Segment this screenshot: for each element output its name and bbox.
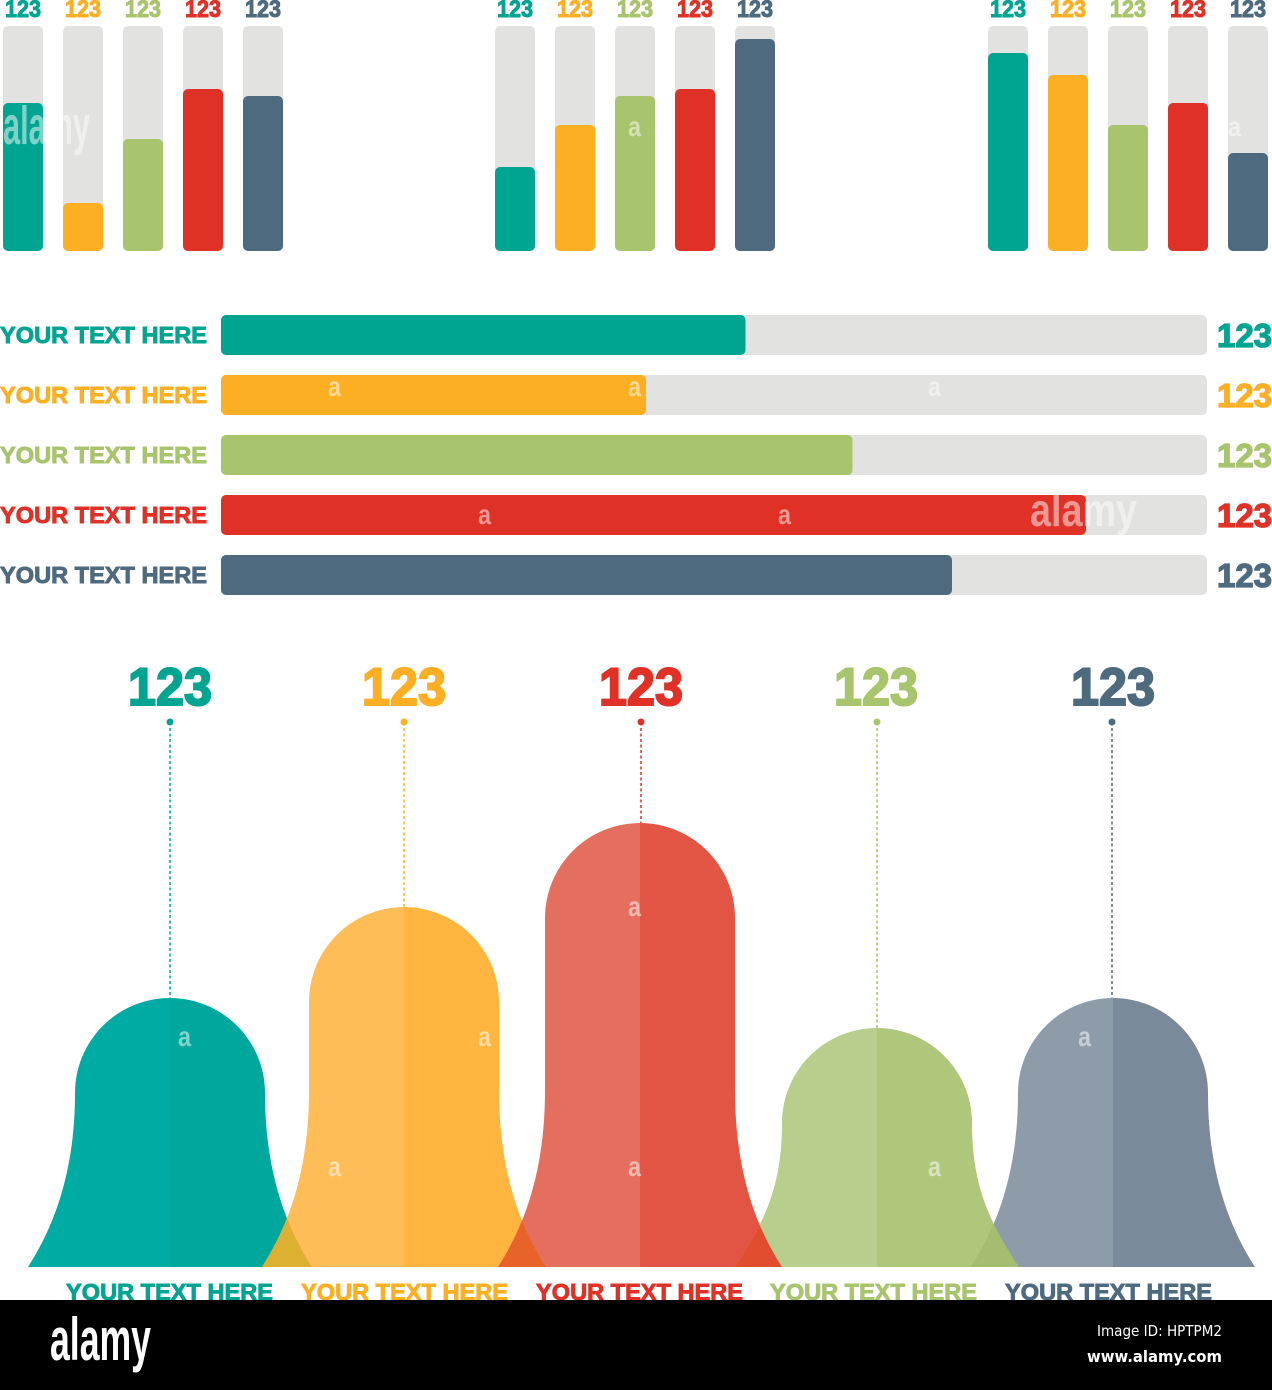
bar green <box>1108 125 1148 251</box>
watermark marks over chart <box>3 96 1241 1182</box>
track <box>221 435 1207 475</box>
track <box>221 375 1207 415</box>
watermark marks over chart: a <box>328 371 341 402</box>
row label: YOUR TEXT HERE <box>0 322 207 348</box>
big number: 123 <box>834 658 918 717</box>
watermark marks over chart: a <box>1228 111 1241 142</box>
watermark marks over chart: a <box>628 1151 641 1182</box>
bell red <box>498 823 782 1267</box>
row slate <box>0 555 1272 595</box>
callout slate <box>1071 658 1155 998</box>
bar orange <box>63 203 103 251</box>
watermark marks over chart: a <box>478 499 491 530</box>
bar green <box>123 139 163 251</box>
bar <box>221 315 746 355</box>
value: 123 <box>1217 377 1272 414</box>
bar tracks <box>3 26 283 251</box>
watermark marks over chart: a <box>478 1021 491 1052</box>
bar tracks <box>988 26 1268 251</box>
bar <box>221 495 1086 535</box>
watermark marks over chart: alamy <box>3 96 90 156</box>
bell label green: YOUR TEXT HERE <box>770 1279 977 1305</box>
bar <box>221 435 852 475</box>
bar tracks <box>495 26 775 251</box>
bar green <box>615 96 655 251</box>
row green <box>0 435 1272 475</box>
dotted leader <box>638 718 644 823</box>
watermark marks over chart: alamy <box>1030 484 1137 536</box>
bar slate <box>1228 153 1268 251</box>
footer band <box>0 1300 1272 1390</box>
big number: 123 <box>1071 658 1155 717</box>
value: 123 <box>1217 497 1272 534</box>
value: 123 <box>1217 557 1272 594</box>
watermark marks over chart: a <box>928 371 941 402</box>
dotted leader <box>874 718 880 1028</box>
watermark marks over chart: a <box>178 1021 191 1052</box>
watermark marks over chart: a <box>628 111 641 142</box>
bell teal <box>28 998 312 1267</box>
dotted leader <box>1108 718 1116 998</box>
bar teal <box>988 53 1028 251</box>
dotted leader <box>400 718 408 907</box>
panel: bell chart <box>28 658 1255 1305</box>
panel: vertical bar chart group 2 <box>495 0 775 251</box>
callout green <box>834 658 918 1028</box>
row label: YOUR TEXT HERE <box>0 442 207 468</box>
row label: YOUR TEXT HERE <box>0 382 207 408</box>
image id: Image ID: HPTPM2 <box>1097 1322 1222 1340</box>
bar red <box>183 89 223 251</box>
bar teal <box>3 103 43 251</box>
value: 123 <box>1217 437 1272 474</box>
dotted leader <box>166 718 174 998</box>
bell label teal: YOUR TEXT HERE <box>66 1279 273 1305</box>
big number: 123 <box>599 658 683 717</box>
bell label orange: YOUR TEXT HERE <box>301 1279 508 1305</box>
bell orange <box>262 907 546 1267</box>
alamy logo: alamy <box>50 1306 151 1373</box>
bar orange <box>555 125 595 251</box>
watermark marks over chart: a <box>628 371 641 402</box>
watermark marks over chart: a <box>328 1151 341 1182</box>
panel: vertical bar chart group 1 <box>3 0 283 251</box>
watermark marks over chart: a <box>1078 1021 1091 1052</box>
website: www.alamy.com <box>1087 1347 1222 1366</box>
bell label red: YOUR TEXT HERE <box>536 1279 743 1305</box>
callout teal <box>128 658 212 998</box>
track <box>221 495 1207 535</box>
bar teal <box>495 167 535 251</box>
bar slate <box>243 96 283 251</box>
bar <box>221 375 646 415</box>
big number: 123 <box>128 658 212 717</box>
watermark marks over chart: a <box>928 1151 941 1182</box>
track <box>221 555 1207 595</box>
row teal <box>0 315 1272 355</box>
value: 123 <box>1217 317 1272 354</box>
watermark marks over chart: a <box>628 891 641 922</box>
bell slate <box>971 998 1255 1267</box>
big number: 123 <box>362 658 446 717</box>
track <box>221 315 1207 355</box>
bar <box>221 555 952 595</box>
bell overlaps <box>262 1218 1019 1267</box>
row red <box>0 495 1272 535</box>
row label: YOUR TEXT HERE <box>0 562 207 588</box>
bar slate <box>735 39 775 251</box>
bar orange <box>1048 75 1088 251</box>
watermark marks over chart: a <box>778 499 791 530</box>
callout red <box>599 658 683 823</box>
row orange <box>0 375 1272 415</box>
bell label slate: YOUR TEXT HERE <box>1005 1279 1212 1305</box>
panel: vertical bar chart group 3 <box>988 0 1268 251</box>
row label: YOUR TEXT HERE <box>0 502 207 528</box>
callout orange <box>362 658 446 907</box>
bar red <box>675 89 715 251</box>
bell green <box>735 1028 1019 1267</box>
panel: horizontal bar chart <box>0 315 1272 595</box>
bar red <box>1168 103 1208 251</box>
